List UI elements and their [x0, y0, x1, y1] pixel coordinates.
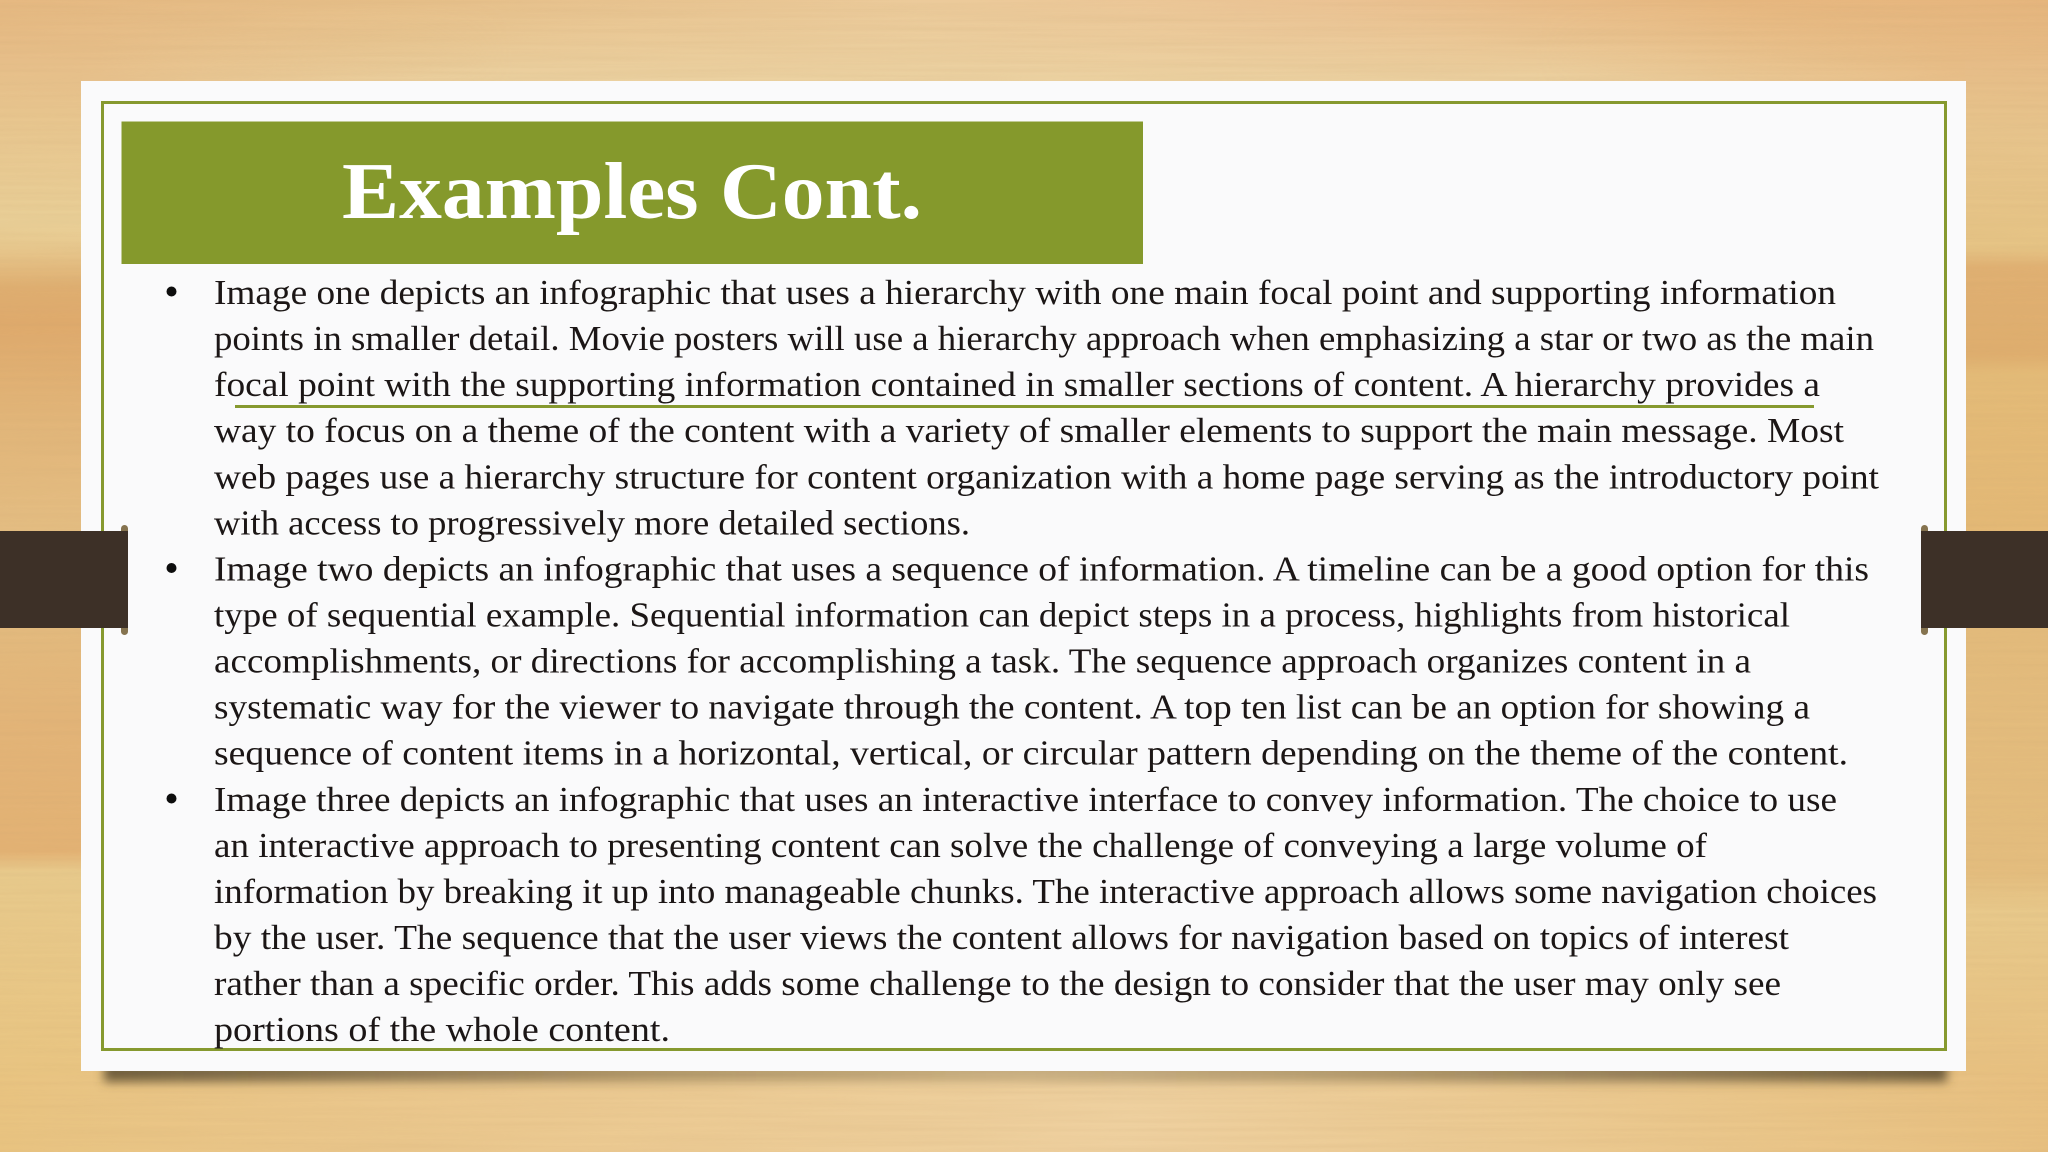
panel shadow — [104, 1062, 1947, 1082]
bullet two: sequence — [166, 549, 1869, 773]
title banner — [122, 122, 1143, 264]
bullet one: hierarchy: points in smaller detail. Movie posters will use a hierarchy approach when emphasizing a star or two as the main — [214, 319, 1874, 358]
bullet three: interactive: rather than a specific order. This adds some challenge to the design to consider that the user may only see — [214, 964, 1781, 1003]
bullet two: sequence: accomplishments, or directions for accomplishing a task. The sequence approach organizes content in a — [214, 642, 1751, 681]
bullet one: hierarchy: way to focus on a theme of the content with a variety of smaller elements to support the main message. Most — [214, 411, 1844, 450]
bullet three: interactive: by the user. The sequence that the user views the content allows for navigation based on topics of interest — [214, 918, 1789, 957]
white slide panel — [81, 81, 1966, 1071]
title: Examples Cont. — [342, 148, 922, 236]
decorative underline on third line — [235, 405, 1814, 408]
bullet two: sequence: systematic way for the viewer to navigate through the content. A top ten list can be an option for showing a — [214, 688, 1810, 727]
bullet two: sequence: Image two depicts an infographic that uses a sequence of information. A timeline can be a good option for this — [214, 549, 1869, 588]
bullet two: sequence: type of sequential example. Sequential information can depict steps in a process, highlights from historical — [214, 596, 1790, 634]
bullet three: interactive — [166, 780, 1877, 1049]
left binder tab — [0, 525, 128, 635]
bullet three: interactive: an interactive approach to presenting content can solve the challenge of conveying a large volume of — [214, 826, 1707, 865]
bullet three: interactive: Image three depicts an infographic that uses an interactive interface to convey information. The choice to use — [214, 780, 1837, 819]
bullet three: interactive: information by breaking it up into manageable chunks. The interactive approach allows some navigation choices — [214, 872, 1877, 911]
bullet one: hierarchy: web pages use a hierarchy structure for content organization with a home page serving as the introductory point — [214, 457, 1879, 496]
bullet three: interactive: portions of the whole content. — [214, 1010, 670, 1049]
bullet one: hierarchy: with access to progressively more detailed sections. — [214, 503, 970, 542]
bullet one: hierarchy: Image one depicts an infographic that uses a hierarchy with one main focal point and supporting information — [214, 273, 1836, 312]
bullet one: hierarchy — [166, 273, 1879, 542]
right binder tab — [1921, 525, 2048, 635]
bullet two: sequence: sequence of content items in a horizontal, vertical, or circular pattern depending on the theme of the content. — [214, 734, 1848, 773]
bullet one: hierarchy: focal point with the supporting information contained in smaller sections of content. A hierarchy provides a — [214, 365, 1820, 404]
body text: bullet list — [166, 273, 1879, 1049]
green inner border — [102, 102, 1946, 1050]
